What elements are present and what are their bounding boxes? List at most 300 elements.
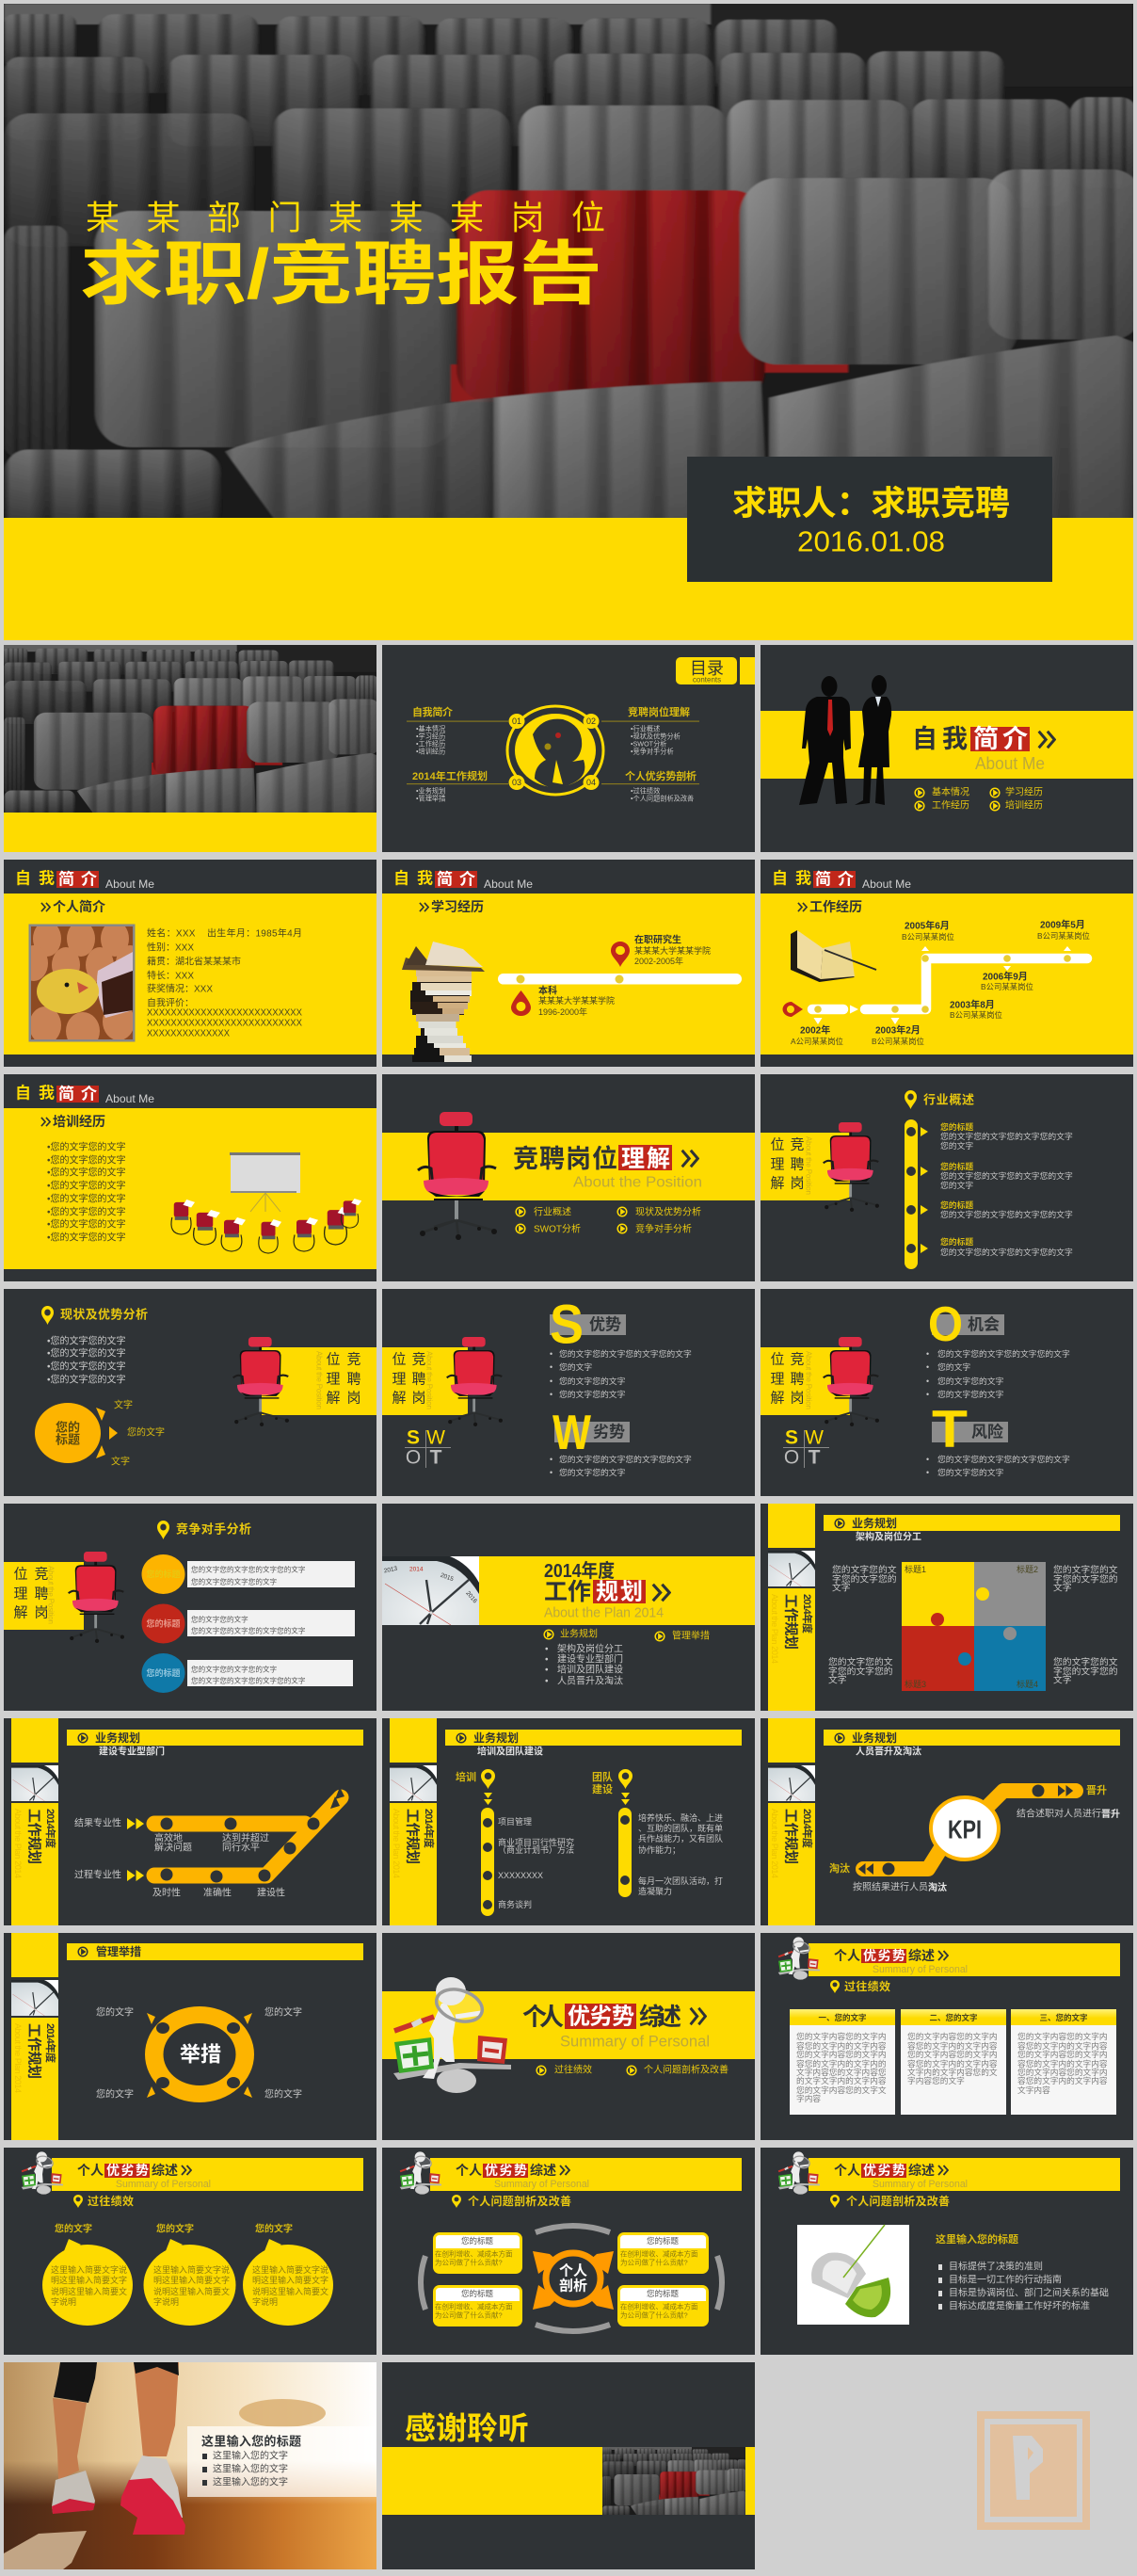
O list: • bbox=[926, 1390, 929, 1399]
central emblem bbox=[533, 2251, 614, 2310]
training list: •您的文字您的文字 bbox=[47, 1141, 126, 1152]
3D figure on balance bbox=[393, 1977, 511, 2093]
side band with vertical title bbox=[382, 1347, 468, 1415]
side band with vertical title: 解 bbox=[326, 1390, 341, 1407]
header banner: 优劣势 bbox=[863, 1948, 905, 1963]
section menu: 竞争对手分析 bbox=[635, 1222, 692, 1235]
S list: 您的文字 bbox=[559, 1361, 592, 1372]
puzzle notes: 您的文字您的文 bbox=[832, 1563, 897, 1576]
O list: 您的文字您的文字 bbox=[937, 1389, 1004, 1399]
puzzle graphic bbox=[902, 1562, 1046, 1691]
side band with vertical title: About the Position bbox=[47, 1566, 55, 1624]
track labels bbox=[74, 1817, 285, 1898]
bubble labels: 文字 bbox=[114, 1399, 133, 1410]
card 1: 的文字文字内的文字内容 bbox=[796, 2075, 887, 2085]
card 2: 二、您的文字 bbox=[929, 2013, 978, 2022]
yellow band bbox=[382, 2447, 755, 2515]
side strip: work plan: About the Plan 2014 bbox=[392, 1809, 401, 1878]
heading bbox=[41, 1306, 148, 1325]
section 03 list bbox=[407, 769, 508, 802]
notebook and pen bbox=[791, 930, 876, 982]
gray arcs bbox=[421, 2226, 722, 2331]
text panel: 这里输入您的标题 bbox=[201, 2435, 301, 2448]
puzzle graphic: 标题4 bbox=[1017, 1679, 1038, 1689]
track labels: 解决问题 bbox=[154, 1842, 192, 1853]
section title: About the Plan 2014 bbox=[544, 1604, 664, 1621]
marker: undergraduate: 本科 bbox=[538, 985, 557, 996]
side strip: work plan: 工作规划 bbox=[26, 2023, 41, 2079]
T threats heading: T bbox=[932, 1399, 968, 1457]
track diagram bbox=[127, 1787, 344, 1883]
text panel: 这里输入您的文字 bbox=[213, 2450, 288, 2461]
problem card top right: 在创利增收、减成本方面 bbox=[620, 2248, 698, 2258]
header: about me bbox=[772, 868, 911, 891]
SWOT badge: W bbox=[805, 1427, 824, 1448]
side band with vertical title: 位 bbox=[392, 1352, 407, 1367]
S list: 您的文字您的文字您的文字您的文字 bbox=[559, 1348, 692, 1359]
track labels: 达到并超过 bbox=[222, 1832, 269, 1843]
side band with vertical title: 理 bbox=[770, 1371, 785, 1388]
subheading: 工作经历 bbox=[809, 899, 862, 914]
O opportunities heading: O bbox=[928, 1297, 963, 1352]
goals list: 目标提供了决策的准则 bbox=[949, 2260, 1043, 2273]
side band with vertical title: 位 bbox=[326, 1352, 341, 1367]
career labels: 2002年 bbox=[800, 1024, 830, 1036]
header: about me: About Me bbox=[105, 877, 154, 891]
side band with vertical title: 聘 bbox=[411, 1371, 426, 1388]
section 02 list: •现状及优势分析 bbox=[631, 733, 681, 740]
contents tab bbox=[676, 657, 755, 684]
timeline text: 您的标题 bbox=[940, 1121, 973, 1132]
slide 12: SWOT S and W bbox=[382, 1289, 755, 1496]
career labels: 2006年9月 bbox=[983, 970, 1028, 983]
career labels: 2005年6月 bbox=[905, 919, 950, 932]
header banner: Summary of Personal bbox=[116, 2179, 211, 2190]
contents tab: contents bbox=[693, 676, 721, 684]
team building column: 、互助的团队，既有单 bbox=[638, 1823, 723, 1833]
timeline text: 您的标题 bbox=[940, 1161, 973, 1171]
SWOT badge bbox=[783, 1427, 829, 1469]
O list: 您的文字 bbox=[937, 1361, 970, 1372]
card 2 bbox=[901, 2009, 1006, 2115]
header bar bbox=[67, 1943, 363, 1960]
O list: 您的文字您的文字您的文字您的文字 bbox=[937, 1348, 1070, 1359]
applicant box bbox=[687, 457, 1052, 582]
subheading: 架构及岗位分工 bbox=[856, 1531, 921, 1542]
section 02 list: •竞争对手分析 bbox=[631, 748, 674, 755]
T list: • bbox=[926, 1468, 929, 1477]
silhouette: man bbox=[799, 676, 851, 805]
timeline bar bbox=[498, 974, 742, 985]
timeline text: 您的文字 bbox=[940, 1140, 973, 1151]
card 3 bbox=[1011, 2009, 1116, 2115]
section menu: 个人问题剖析及改善 bbox=[644, 2064, 729, 2075]
header banner bbox=[22, 2151, 363, 2195]
problem card bottom right: 在创利增收、减成本方面 bbox=[620, 2301, 698, 2310]
puzzle notes: 文字 bbox=[832, 1582, 851, 1593]
profile details: XXXXXXXXXXXXXXXXXXXXXXXXXX bbox=[147, 1019, 302, 1028]
training column bbox=[456, 1769, 574, 1916]
side strip: work plan: 工作规划 bbox=[405, 1809, 420, 1864]
section 01 list: 自我简介 bbox=[412, 705, 453, 718]
section title: 规划 bbox=[596, 1580, 643, 1604]
card 3: 三、您的文字 bbox=[1039, 2013, 1088, 2022]
section 04 list: 个人优劣势剖析 bbox=[625, 769, 697, 782]
bubble labels bbox=[111, 1399, 165, 1467]
red office chair bbox=[824, 1337, 879, 1426]
book stack bbox=[402, 942, 485, 1062]
section title: 竞聘岗位 bbox=[513, 1144, 617, 1173]
heading: 过往绩效 bbox=[844, 1979, 890, 1993]
marker: undergraduate bbox=[511, 985, 615, 1017]
side band with vertical title: 聘 bbox=[790, 1371, 805, 1388]
plan list bbox=[545, 1642, 623, 1687]
side band with vertical title: 竞 bbox=[790, 1350, 805, 1367]
runner right leg bbox=[120, 2362, 185, 2535]
section 02 list bbox=[601, 705, 699, 755]
side band with vertical title bbox=[761, 1133, 850, 1200]
SWOT badge: T bbox=[430, 1446, 442, 1469]
section title bbox=[513, 1144, 702, 1190]
competitor card 3: 您的文字您的文字您的文字您的文字 bbox=[191, 1676, 306, 1685]
bubble 3: 字说明 bbox=[252, 2296, 278, 2307]
header bar: 业务规划 bbox=[852, 1516, 897, 1530]
team building column: 每月一次团队活动，打 bbox=[638, 1876, 723, 1886]
header: about me: 自我 bbox=[393, 868, 433, 887]
section title bbox=[912, 725, 1054, 773]
header: about me: 自我 bbox=[15, 1083, 55, 1102]
section 04 list: •过往绩效 bbox=[631, 787, 660, 795]
side band with vertical title: 聘 bbox=[346, 1371, 361, 1388]
header banner: 综述 bbox=[530, 2163, 556, 2178]
card 3: 容您的文字内的文字内容 bbox=[1017, 2075, 1108, 2085]
bubble labels: 文字 bbox=[111, 1456, 130, 1467]
W list: 您的文字您的文字您的文字您的文字 bbox=[559, 1454, 692, 1464]
applicant box: 2016.01.08 bbox=[797, 525, 945, 557]
side band with vertical title: 岗 bbox=[411, 1390, 426, 1407]
track labels: 过程专业性 bbox=[74, 1868, 121, 1881]
silhouette: woman bbox=[855, 675, 891, 805]
career labels: B公司某某岗位 bbox=[872, 1037, 924, 1046]
card 2: 容您的文字内的文字内容 bbox=[907, 2058, 998, 2069]
card 3: 文字内容 bbox=[1017, 2085, 1050, 2095]
header: about me bbox=[393, 868, 533, 891]
training column: 项目管理 bbox=[498, 1816, 532, 1827]
side band with vertical title bbox=[761, 1347, 850, 1415]
clock image bbox=[382, 1556, 479, 1625]
timeline text: 您的文字 bbox=[940, 1180, 973, 1190]
heading bbox=[157, 1521, 251, 1539]
bubble 3 bbox=[243, 2222, 333, 2326]
section menu: 工作经历 bbox=[932, 798, 969, 812]
bubble 3: 您的文字 bbox=[255, 2222, 293, 2235]
bubble 1: 说明这里输入简要文 bbox=[51, 2286, 127, 2296]
thinker emblem with numbered circles: 04 bbox=[586, 778, 596, 787]
side band with vertical title: 位 bbox=[770, 1137, 785, 1152]
bullet list: •您的文字您的文字 bbox=[47, 1335, 126, 1346]
bubble 2: 明这里输入简要文字 bbox=[153, 2275, 230, 2285]
side strip: work plan: 2014年度 bbox=[423, 1809, 436, 1848]
subheading: 培训经历 bbox=[53, 1114, 105, 1129]
KPI labels: 淘汰 bbox=[829, 1861, 850, 1875]
section menu: 过往绩效 bbox=[554, 2064, 592, 2075]
competitor card 2: 您的标题 bbox=[146, 1618, 181, 1629]
bubble 2: 这里输入简要文字说 bbox=[153, 2264, 230, 2275]
puzzle notes: 您的文字您的文 bbox=[828, 1655, 893, 1668]
section title: 2014年度 bbox=[544, 1560, 615, 1582]
header: about me: 简介 bbox=[58, 870, 97, 889]
career labels: B公司某某岗位 bbox=[1037, 931, 1090, 941]
section 01 list: •培训经历 bbox=[416, 748, 445, 755]
contents tab: 目录 bbox=[690, 659, 724, 678]
yellow footer band bbox=[4, 518, 1133, 640]
header: about me: 简介 bbox=[815, 870, 854, 889]
measures labels: 您的文字 bbox=[96, 2088, 134, 2100]
SWOT badge: S bbox=[785, 1427, 798, 1448]
problem card bottom left bbox=[433, 2285, 522, 2326]
S list bbox=[550, 1348, 692, 1399]
track labels: 建设性 bbox=[257, 1887, 285, 1898]
thinker emblem with numbered circles: 03 bbox=[512, 778, 521, 787]
W weaknesses heading: 劣势 bbox=[593, 1424, 625, 1441]
W weaknesses heading: W bbox=[552, 1406, 592, 1460]
side band with vertical title: 解 bbox=[13, 1604, 28, 1621]
side strip: work plan bbox=[11, 1718, 58, 1925]
T list: • bbox=[926, 1455, 929, 1464]
track labels: 准确性 bbox=[203, 1887, 232, 1898]
problem card top right bbox=[617, 2232, 709, 2274]
measures labels: 您的文字 bbox=[264, 2005, 302, 2019]
header banner: 优劣势 bbox=[106, 2163, 149, 2178]
card 1: 您的文字内容您的文字内 bbox=[796, 2049, 887, 2059]
sunset background bbox=[4, 2362, 376, 2569]
training column: 培训 bbox=[456, 1770, 476, 1783]
section title: 工作 bbox=[544, 1579, 591, 1605]
side strip: work plan: 工作规划 bbox=[26, 1809, 41, 1864]
team building column: 协作能力； bbox=[638, 1844, 681, 1855]
training list: •您的文字您的文字 bbox=[47, 1166, 126, 1179]
header: about me bbox=[15, 868, 154, 891]
T list bbox=[926, 1454, 1070, 1477]
problem card bottom right: 您的标题 bbox=[647, 2289, 679, 2298]
seats photo thumbnail bbox=[4, 645, 379, 817]
yellow band bbox=[4, 813, 376, 852]
team building column: 团队 bbox=[592, 1770, 613, 1783]
KPI labels: 晋升 bbox=[1086, 1783, 1107, 1796]
puzzle notes bbox=[828, 1563, 1118, 1685]
section title: 理解 bbox=[621, 1146, 670, 1172]
header banner: 综述 bbox=[152, 2163, 178, 2178]
goals list: 这里输入您的标题 bbox=[936, 2232, 1018, 2246]
section 04 list: •个人问题剖析及改善 bbox=[631, 795, 694, 802]
text panel: 这里输入您的文字 bbox=[213, 2476, 288, 2487]
profile details: 姓名：XXX 出生年月：1985年4月 bbox=[147, 926, 302, 940]
O list bbox=[926, 1348, 1070, 1399]
heading: 竞争对手分析 bbox=[176, 1521, 251, 1537]
slide 5: personal profile bbox=[4, 860, 376, 1067]
career labels: 2003年2月 bbox=[875, 1024, 921, 1036]
section menu: 学习经历 bbox=[1005, 785, 1043, 798]
marker: postgraduate bbox=[611, 934, 711, 967]
card 2: 字内容您的文字 bbox=[907, 2075, 965, 2085]
problem card bottom left: 您的标题 bbox=[461, 2289, 493, 2298]
section menu: 培训经历 bbox=[1005, 798, 1043, 812]
competitor card 1: 您的文字您的文字您的文字 bbox=[191, 1576, 278, 1586]
section title bbox=[522, 2003, 710, 2051]
side strip: work plan bbox=[768, 1718, 815, 1925]
card 1: 容您的文字内的文字内的 bbox=[796, 2058, 887, 2069]
training column: XXXXXXXX bbox=[498, 1871, 543, 1880]
O opportunities heading bbox=[928, 1297, 1004, 1352]
subheading: 建设专业型部门 bbox=[99, 1746, 165, 1757]
target image bbox=[797, 2225, 909, 2325]
timeline text: 您的标题 bbox=[940, 1199, 973, 1210]
header bar bbox=[824, 1730, 1120, 1746]
S list: 您的文字您的文字 bbox=[559, 1376, 626, 1386]
side strip: work plan bbox=[390, 1718, 437, 1925]
section title: 简介 bbox=[973, 725, 1028, 753]
header: about me bbox=[15, 1083, 154, 1105]
slide 14: competitor analysis bbox=[4, 1504, 376, 1711]
profile details: XXXXXXXXXXXXXXXXXXXXXXXXXX bbox=[147, 1007, 302, 1019]
problem card top right: 为公司做了什么贡献? bbox=[620, 2258, 688, 2267]
clock image: 2016 bbox=[464, 1590, 478, 1605]
bubble 1: 您的文字 bbox=[55, 2222, 92, 2235]
timeline text: 您的文字您的文字您的文字您的文字 bbox=[940, 1209, 1073, 1219]
header bar: 业务规划 bbox=[852, 1731, 897, 1745]
card 1: 您的文字内容您的文字内 bbox=[796, 2031, 887, 2041]
section 03 list: •管理举措 bbox=[416, 795, 445, 802]
header bar bbox=[67, 1730, 363, 1746]
problem card bottom left: 在创利增收、减成本方面 bbox=[435, 2301, 513, 2310]
header bar: 管理举措 bbox=[96, 1944, 141, 1958]
career labels: 2003年8月 bbox=[950, 998, 995, 1011]
card 3: 您的文字内容您的文字内 bbox=[1017, 2031, 1108, 2041]
side strip: work plan: 工作规划 bbox=[783, 1594, 798, 1650]
marker: postgraduate: 在职研究生 bbox=[634, 934, 681, 945]
KPI labels: 按照结果进行人员淘汰 bbox=[853, 1881, 947, 1892]
goals list: 目标是一切工作的行动指南 bbox=[949, 2273, 1062, 2286]
card 1: 您的文字内容您的文字文 bbox=[796, 2085, 887, 2095]
header banner: 优劣势 bbox=[863, 2163, 905, 2178]
card 2: 容您的文字内的文字内容 bbox=[907, 2040, 998, 2051]
T list: 您的文字您的文字 bbox=[937, 1467, 1004, 1477]
card 3: 您的文字内容您的文字内 bbox=[1017, 2049, 1108, 2059]
bubble 3: 这里输入简要文字说 bbox=[252, 2264, 328, 2275]
bullet list: •您的文字您的文字 bbox=[47, 1346, 126, 1360]
team building column bbox=[592, 1769, 723, 1897]
competitor card 1 bbox=[141, 1554, 355, 1594]
side strip: work plan: About the Plan 2014 bbox=[13, 2023, 23, 2093]
SWOT badge: S bbox=[407, 1427, 420, 1448]
side band with vertical title: 岗 bbox=[790, 1175, 805, 1192]
side strip: work plan: 2014年度 bbox=[44, 2023, 57, 2063]
header banner: 个人 bbox=[834, 1948, 860, 1963]
T threats heading bbox=[932, 1399, 1008, 1457]
card 3: 容您的文字内的文字内容 bbox=[1017, 2058, 1108, 2069]
slide 16: business plan puzzle bbox=[761, 1504, 1133, 1711]
competitor card 1: 您的标题 bbox=[146, 1569, 181, 1579]
plan list: • bbox=[545, 1665, 549, 1676]
goals list: 目标是协调岗位、部门之间关系的基础 bbox=[949, 2286, 1109, 2299]
slide 24: personal problem analysis bbox=[382, 2148, 755, 2355]
side band with vertical title: 解 bbox=[770, 1175, 785, 1192]
applicant box: 求职人：求职竞聘 bbox=[732, 484, 1010, 522]
slide 7: work history bbox=[761, 860, 1133, 1067]
side strip: work plan: About the Plan 2014 bbox=[13, 1809, 23, 1878]
side band with vertical title: 竞 bbox=[411, 1350, 426, 1367]
bubble 2 bbox=[143, 2222, 235, 2326]
career labels bbox=[791, 919, 1090, 1046]
problem card bottom right bbox=[617, 2285, 709, 2326]
header banner bbox=[778, 2151, 1120, 2195]
slide 4: about me section bbox=[761, 645, 1133, 852]
slide 22: past performance cards bbox=[761, 1933, 1133, 2140]
section 03 list: •业务规划 bbox=[416, 787, 445, 795]
section 01 list bbox=[407, 705, 508, 755]
profile details: XXXXXXXXXXXXXX bbox=[147, 1028, 230, 1039]
cinema seats photo bbox=[4, 4, 1137, 532]
header banner: Summary of Personal bbox=[494, 2179, 589, 2190]
heading: 行业概述 bbox=[923, 1092, 974, 1107]
plan list: • bbox=[545, 1655, 549, 1665]
training column: 商务谈判 bbox=[498, 1899, 532, 1909]
red office chair bbox=[418, 1112, 497, 1240]
side band with vertical title bbox=[262, 1347, 376, 1415]
measures ring bbox=[145, 2006, 254, 2102]
section 02 list: •行业概述 bbox=[631, 725, 660, 733]
problem card bottom right: 为公司做了什么贡献? bbox=[620, 2310, 688, 2320]
career labels: B公司某某岗位 bbox=[902, 932, 954, 942]
goals list: 目标达成度是衡量工作好坏的标准 bbox=[949, 2299, 1090, 2312]
puzzle notes: 文字 bbox=[828, 1674, 847, 1685]
header: about me: About Me bbox=[862, 877, 911, 891]
clock image: 2015 bbox=[440, 1572, 455, 1583]
training column: （商业计划书）方法 bbox=[498, 1844, 574, 1855]
bubble 1 bbox=[42, 2222, 133, 2326]
SWOT badge bbox=[405, 1427, 451, 1469]
team building column: 培养快乐、融洽、上进 bbox=[638, 1812, 723, 1823]
profile details: 自我评价： bbox=[147, 996, 194, 1009]
puzzle graphic: 标题3 bbox=[905, 1679, 926, 1689]
plan list: 培训及团队建设 bbox=[557, 1663, 623, 1676]
W list: 您的文字您的文字 bbox=[559, 1467, 626, 1477]
T threats heading: 风险 bbox=[971, 1422, 1003, 1441]
profile details: 籍贯：湖北省某某某市 bbox=[147, 955, 241, 968]
S list: • bbox=[550, 1349, 552, 1359]
header: about me: About Me bbox=[105, 1092, 154, 1105]
slide 6: education bbox=[382, 860, 755, 1067]
orange title bubble: 您的 bbox=[56, 1420, 80, 1435]
career labels: B公司某某岗位 bbox=[950, 1010, 1002, 1020]
problem card top left: 您的标题 bbox=[461, 2236, 493, 2246]
runner left leg bbox=[52, 2362, 97, 2514]
S strengths heading: 优势 bbox=[589, 1316, 621, 1333]
section 01 list: •基本情况 bbox=[416, 725, 445, 733]
heading: 现状及优势分析 bbox=[60, 1307, 148, 1322]
timeline text: 您的标题 bbox=[940, 1236, 973, 1247]
W list bbox=[550, 1454, 692, 1477]
training list: •您的文字您的文字 bbox=[47, 1218, 126, 1230]
section menu bbox=[915, 785, 1043, 812]
timeline text bbox=[940, 1121, 1073, 1257]
side band with vertical title: 理 bbox=[392, 1371, 407, 1388]
career labels: 2009年5月 bbox=[1040, 919, 1085, 930]
problem card top left: 为公司做了什么贡献? bbox=[435, 2258, 503, 2267]
heading bbox=[905, 1090, 974, 1109]
side band with vertical title: About the Position bbox=[804, 1351, 813, 1409]
thinker emblem with numbered circles bbox=[507, 706, 603, 795]
